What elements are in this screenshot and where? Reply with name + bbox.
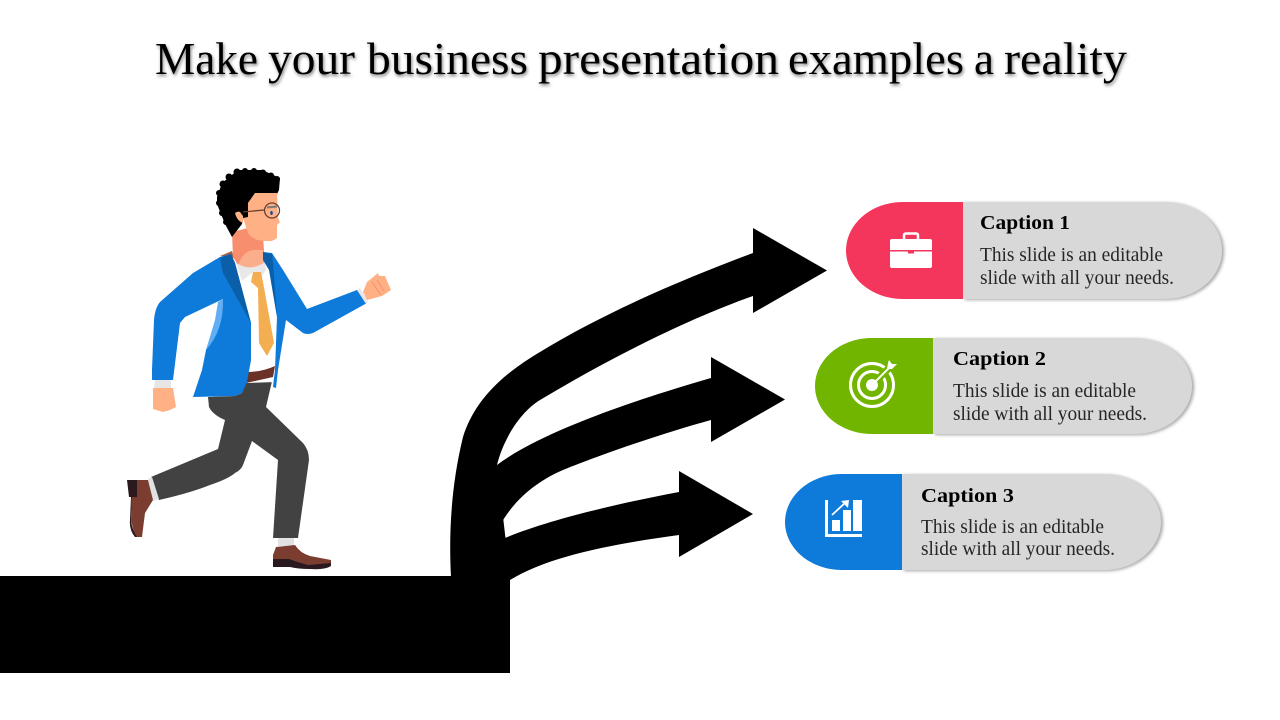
grey body <box>933 338 1192 434</box>
shirt <box>233 254 277 383</box>
green cap <box>815 338 933 434</box>
tie <box>251 272 274 356</box>
trousers <box>151 377 309 538</box>
title: reality <box>1004 33 1127 84</box>
arrow 2 <box>470 357 785 560</box>
arrow 3 <box>470 471 753 590</box>
title: presentation <box>538 33 779 84</box>
rear hand <box>153 380 176 412</box>
caption heading: Caption 2 <box>953 348 1046 370</box>
panel: caption 3 <box>785 474 1161 570</box>
icon: briefcase <box>890 234 932 268</box>
hair <box>216 168 280 237</box>
caption text <box>921 516 1115 560</box>
arrows: branching paths <box>450 228 827 590</box>
title: your <box>268 33 355 84</box>
caption heading: Caption 1 <box>980 212 1070 234</box>
panel: caption 2 <box>815 338 1192 434</box>
panel: caption 1 <box>846 202 1222 299</box>
jacket <box>152 252 367 397</box>
ledge block <box>0 576 510 673</box>
caption text: This slide is an editable <box>980 244 1163 266</box>
socks <box>148 477 294 546</box>
icon: bar chart <box>825 500 862 537</box>
grey body <box>963 202 1222 299</box>
caption text: This slide is an editable <box>953 380 1136 402</box>
front hand <box>357 273 391 304</box>
caption heading: Caption 3 <box>921 485 1014 507</box>
title: Make <box>155 33 258 84</box>
neck <box>220 228 265 271</box>
title: examples <box>788 33 964 84</box>
caption text: slide with all your needs. <box>921 538 1115 560</box>
glasses <box>243 203 280 218</box>
front shoe <box>273 545 331 569</box>
title: a <box>974 33 994 84</box>
caption text <box>980 244 1174 289</box>
caption text <box>953 380 1147 425</box>
title: business <box>367 33 528 84</box>
grey body <box>902 474 1161 570</box>
ear <box>235 212 243 223</box>
belt <box>246 366 275 383</box>
caption text: slide with all your needs. <box>953 403 1147 425</box>
illustration: running businessman <box>127 168 391 569</box>
red cap <box>846 202 963 299</box>
rear shoe <box>127 480 153 537</box>
head <box>243 193 280 241</box>
collar <box>236 262 266 282</box>
blue cap <box>785 474 902 570</box>
caption text: slide with all your needs. <box>980 267 1174 289</box>
caption text: This slide is an editable <box>921 516 1104 538</box>
arrow 1 <box>450 228 827 577</box>
icon: target <box>850 360 897 406</box>
